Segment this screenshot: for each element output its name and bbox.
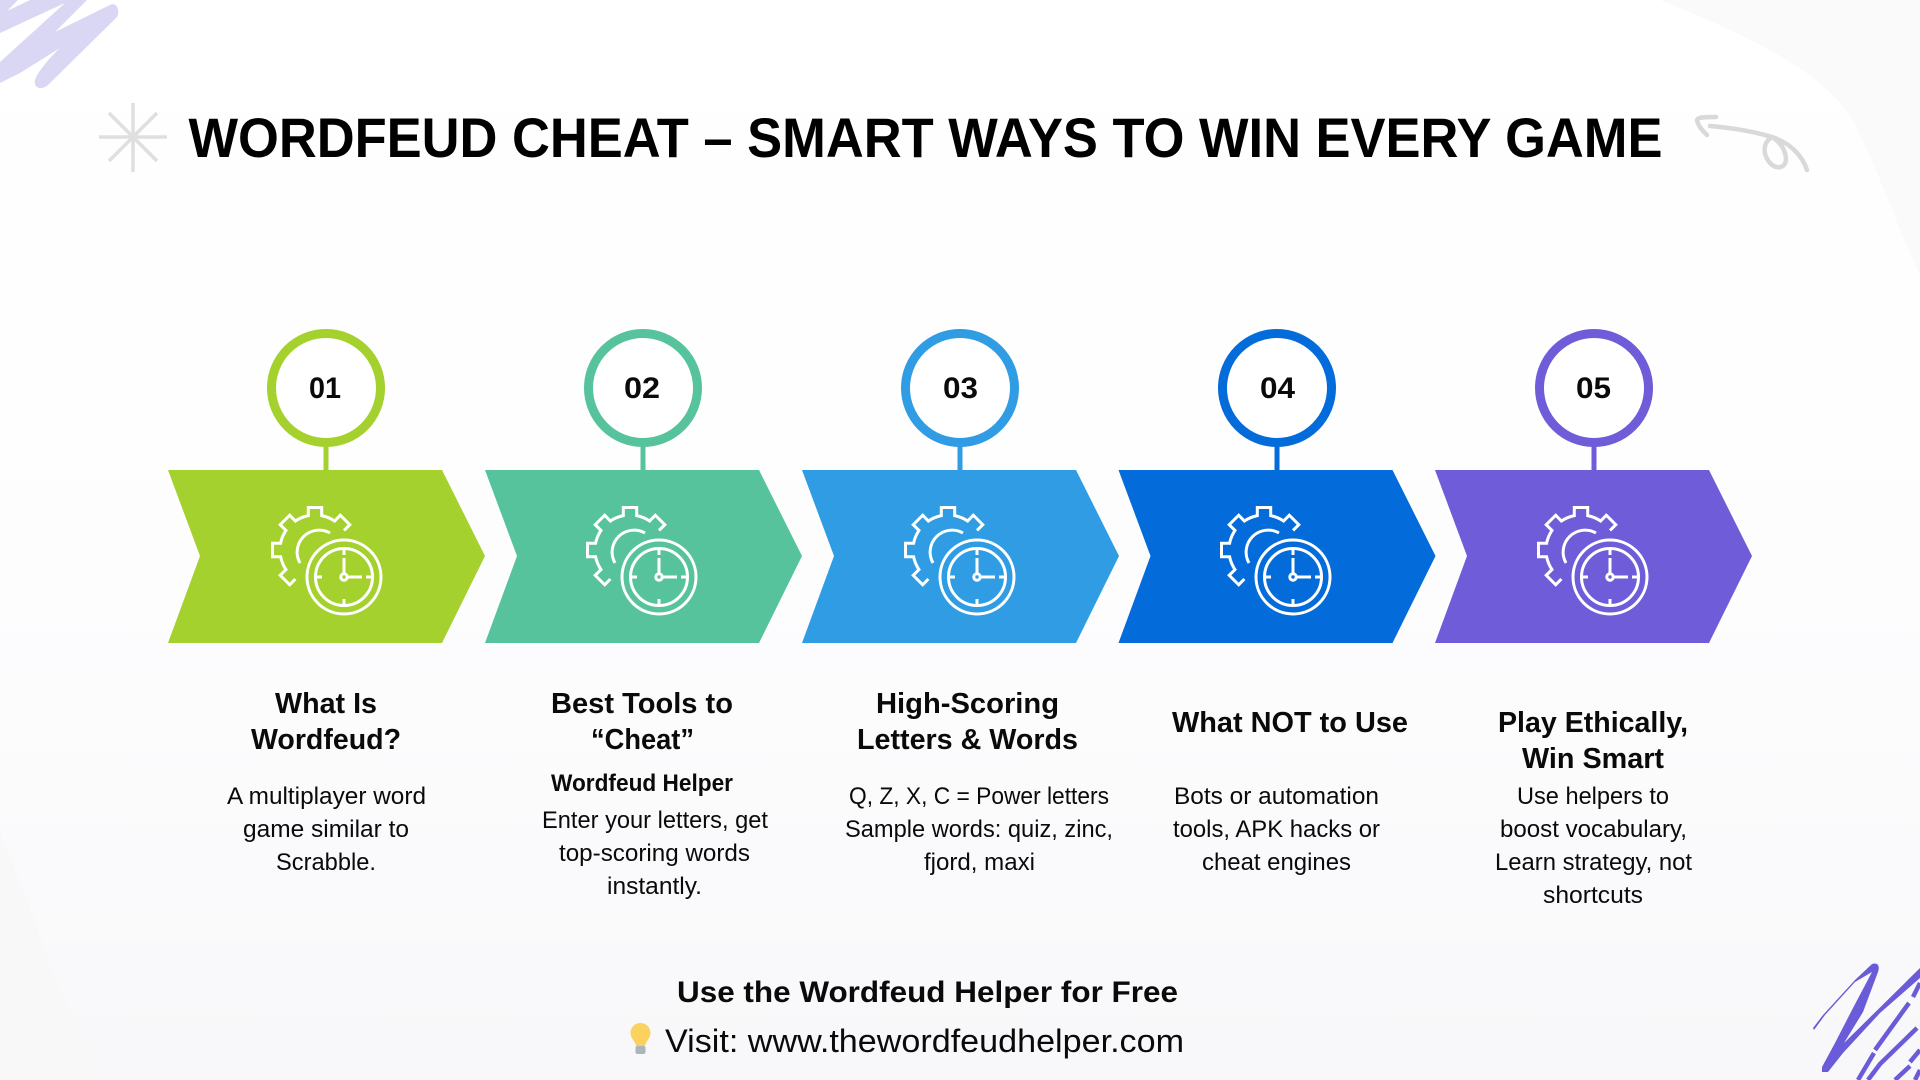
step 4 (1118, 334, 1436, 876)
step 1 (168, 334, 485, 876)
footer link text: Visit: www.thewordfeudhelper.com (665, 1023, 1184, 1059)
step 2 body: top-scoring words (559, 840, 750, 867)
step 3 stem (958, 440, 962, 472)
step 2 number: 02 (624, 372, 660, 405)
step 5 heading: Win Smart (1522, 743, 1664, 775)
step 1 body: A multiplayer word (227, 783, 426, 810)
background shape: bottom left corner (0, 830, 112, 1080)
step 2 chevron (485, 470, 802, 643)
step 3 number badge (906, 334, 1014, 442)
step 4 chevron (1118, 470, 1436, 643)
background shape: top right corner (1660, 0, 1920, 275)
step 3 body (845, 783, 1113, 876)
decorative scribble: bottom right (1813, 963, 1920, 1080)
step 5 stem (1592, 440, 1596, 472)
step 3 (802, 334, 1119, 876)
step 1 heading: What Is (275, 688, 377, 720)
step 2 subheading: Wordfeud Helper (551, 770, 733, 797)
step 2 heading: Best Tools to (551, 688, 733, 720)
step 2 (485, 334, 802, 900)
icon: light bulb (630, 1023, 650, 1054)
step 4 heading: What NOT to Use (1172, 707, 1408, 739)
step 4 body: tools, APK hacks or (1173, 816, 1380, 843)
step 3 heading (857, 688, 1078, 756)
step 3 heading: Letters & Words (857, 724, 1078, 756)
step 1 number: 01 (309, 372, 341, 405)
step 1 stem (324, 440, 328, 472)
step 4 body (1173, 783, 1380, 876)
step 3 number: 03 (943, 372, 978, 405)
step 5 body: Learn strategy, not (1495, 849, 1692, 876)
footer heading: Use the Wordfeud Helper for Free (677, 976, 1178, 1009)
arrow: curly arrow top right (1697, 117, 1807, 170)
step 3 body: Sample words: quiz, zinc, (845, 816, 1113, 843)
step 1 heading: Wordfeud? (251, 724, 401, 756)
step 3 icon: gear and clock (906, 508, 1014, 614)
step 5 number: 05 (1576, 372, 1611, 405)
step 5 body: shortcuts (1543, 882, 1643, 909)
step 2 number badge (588, 334, 698, 442)
step 4 icon: gear and clock (1222, 508, 1330, 614)
step 4 stem (1274, 440, 1280, 472)
step 5 body (1495, 783, 1692, 909)
step 4 body: Bots or automation (1174, 783, 1379, 810)
decorative scribble: top left (0, 0, 118, 88)
icon: asterisk star (99, 103, 167, 172)
step 2 body (542, 807, 768, 900)
step 4 body: cheat engines (1202, 849, 1351, 876)
step 5 number badge (1540, 334, 1648, 442)
step 1 number badge (272, 334, 380, 442)
step 5 body: Use helpers to (1517, 783, 1669, 810)
step 2 heading: “Cheat” (591, 724, 694, 756)
step 3 heading: High-Scoring (876, 688, 1059, 720)
step 2 stem (640, 440, 646, 472)
step 1 chevron (168, 470, 485, 643)
step 5 (1435, 334, 1752, 909)
step 5 body: boost vocabulary, (1500, 816, 1687, 843)
step 4 number badge (1222, 334, 1332, 442)
step 5 heading: Play Ethically, (1498, 707, 1688, 739)
step 5 chevron (1435, 470, 1752, 643)
step 5 icon: gear and clock (1538, 508, 1647, 614)
step 1 icon: gear and clock (272, 508, 381, 614)
title: WORDFEUD CHEAT – SMART WAYS TO WIN EVERY GAME (188, 106, 1662, 169)
step 5 heading (1498, 707, 1688, 775)
step 1 body (227, 783, 426, 876)
step 2 body: Enter your letters, get (542, 807, 768, 834)
step 2 icon: gear and clock (588, 508, 696, 614)
step 2 body: instantly. (607, 873, 702, 900)
step 4 number: 04 (1260, 372, 1295, 405)
step 1 body: game similar to (243, 816, 409, 843)
step 3 chevron (802, 470, 1119, 643)
step 1 heading (251, 688, 401, 756)
step 1 body: Scrabble. (276, 849, 376, 876)
step 3 body: Q, Z, X, C = Power letters (849, 783, 1109, 810)
step 2 heading (551, 688, 733, 756)
step 3 body: fjord, maxi (924, 849, 1035, 876)
